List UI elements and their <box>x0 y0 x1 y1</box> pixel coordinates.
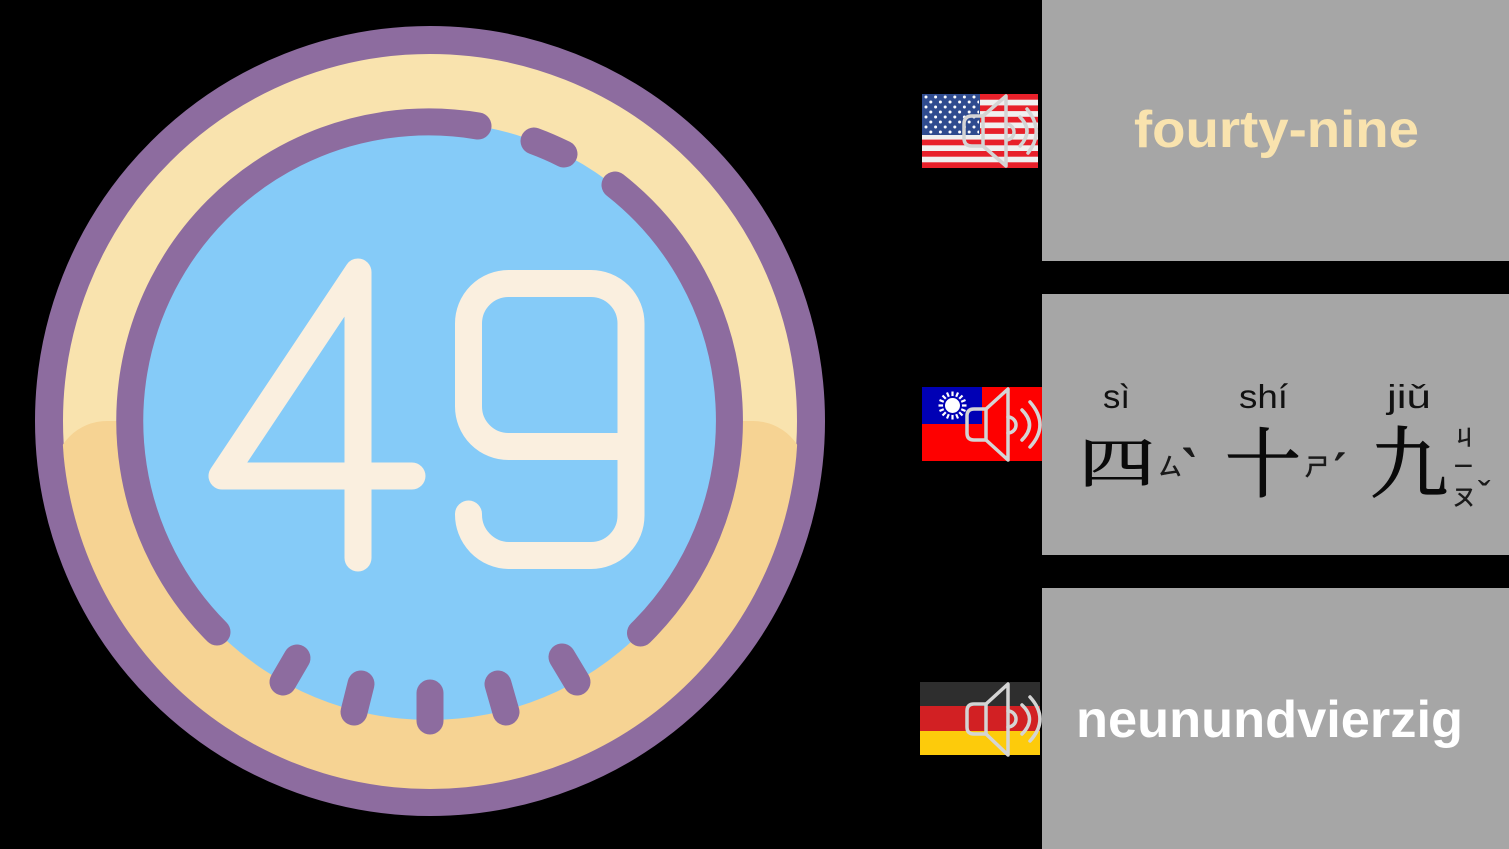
zhuyin si: ㄙ <box>1158 454 1182 481</box>
digit 9 <box>468 284 631 556</box>
character si: 四 <box>1078 435 1155 494</box>
zhuyin shi: ˊ <box>1329 442 1349 509</box>
pinyin si: sì <box>1103 378 1130 415</box>
zhuyin si <box>1158 435 1201 513</box>
digit 4 <box>222 272 412 558</box>
number badge <box>49 40 811 802</box>
zhuyin shi: ㄕ <box>1305 454 1329 481</box>
panel: German <box>1042 588 1509 849</box>
zhuyin jiu: ˇ <box>1478 475 1491 517</box>
character shi: 十 <box>1225 424 1301 508</box>
panel: Chinese <box>1042 294 1509 555</box>
badge outer ring <box>49 40 811 802</box>
flag: USA <box>922 94 1038 168</box>
zhuyin shi <box>1305 442 1349 509</box>
pinyin jiu: jiǔ <box>1386 378 1431 415</box>
pinyin shi: shí <box>1239 378 1288 415</box>
sun emblem <box>938 392 966 420</box>
Chinese reading <box>1078 378 1491 517</box>
zhuyin si: ˋ <box>1178 435 1201 513</box>
flag: Taiwan <box>922 387 1042 461</box>
zhuyin jiu: ㄡ <box>1453 485 1475 510</box>
badge lower shading <box>54 421 806 800</box>
badge blue centre <box>130 122 728 720</box>
panel: English <box>1042 0 1509 261</box>
icon: speaker USA <box>964 96 1036 166</box>
icon: speaker Taiwan <box>967 389 1040 460</box>
zhuyin jiu: ㄧ <box>1453 456 1474 479</box>
English word: fourty-nine <box>1134 101 1419 159</box>
German word: neunundvierzig <box>1076 691 1463 749</box>
numeral 49 <box>222 272 631 558</box>
zhuyin jiu: ㄐ <box>1454 427 1475 450</box>
zhuyin jiu <box>1453 427 1491 517</box>
flag: Germany <box>920 682 1040 755</box>
icon: speaker Germany <box>967 684 1040 755</box>
character jiu: 九 <box>1370 421 1448 508</box>
progress ring segments <box>130 122 729 721</box>
